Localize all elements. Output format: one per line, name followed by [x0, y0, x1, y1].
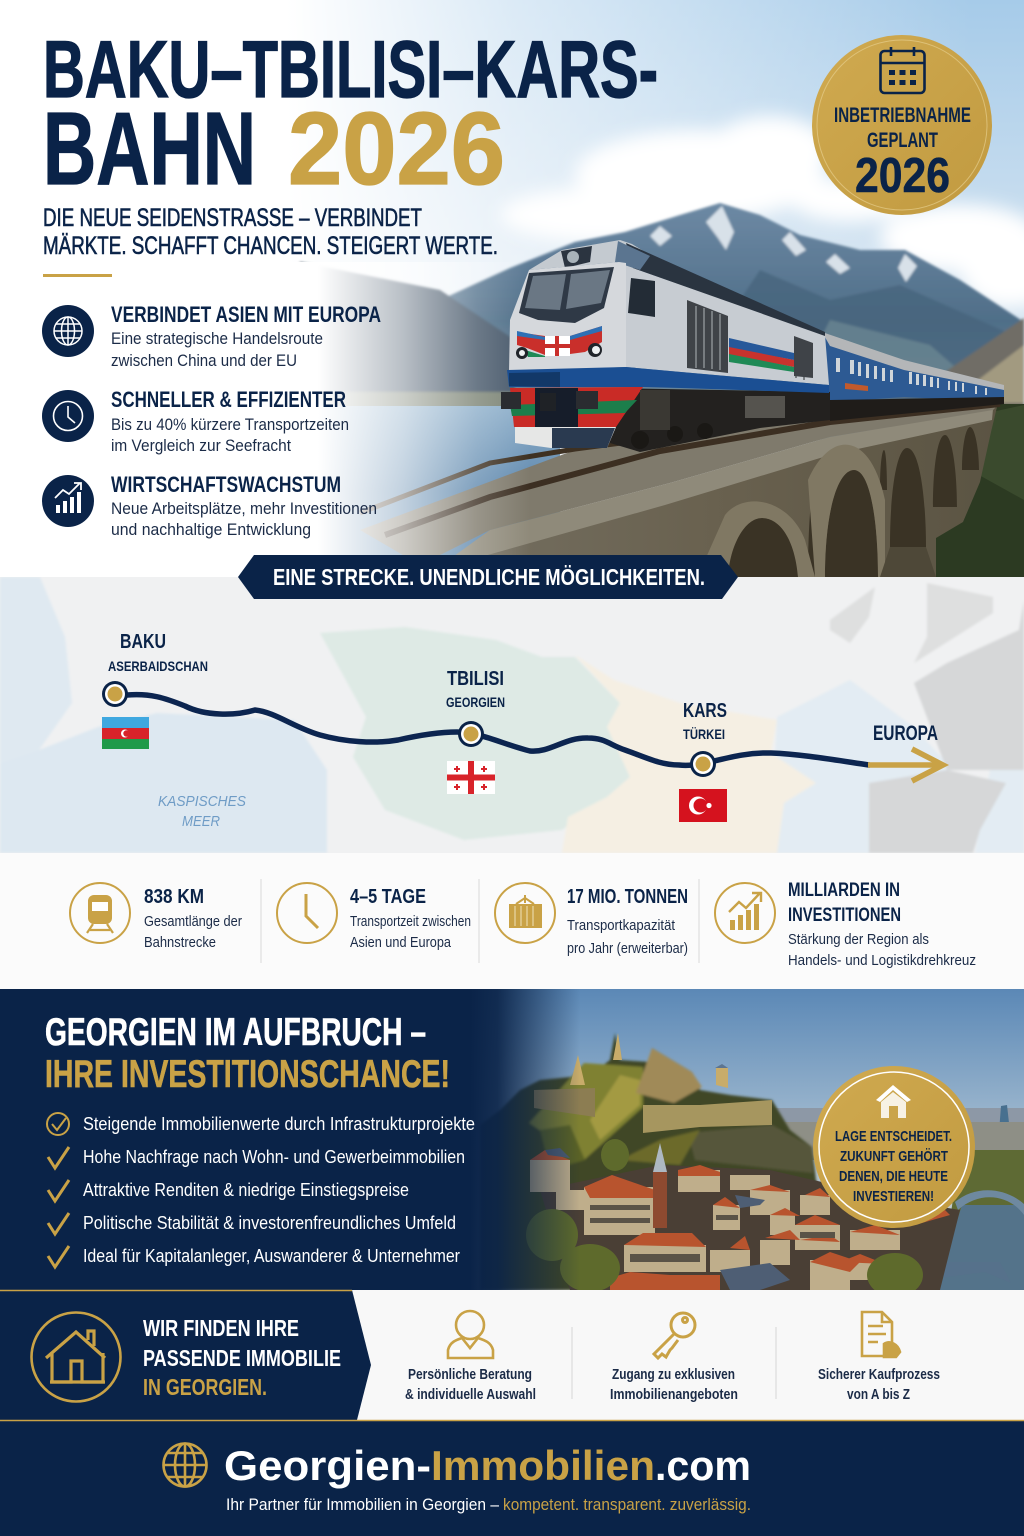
ribbon — [238, 555, 738, 599]
benefit: wirtschaft: und nachhaltige Entwicklung — [111, 520, 311, 539]
check list: Politische Stabilität & investorenfreundliches Umfeld — [83, 1213, 456, 1233]
wheels — [631, 431, 649, 449]
badge: Inbetriebnahme: 2026 — [855, 149, 950, 203]
front bumper stripes — [510, 387, 643, 427]
icon: circled check — [47, 1113, 69, 1135]
badge: Inbetriebnahme — [812, 35, 992, 215]
benefit: schneller — [42, 387, 349, 455]
flag Georgien — [447, 761, 495, 794]
subtitle — [43, 204, 498, 260]
city labels: TÜRKEI — [683, 726, 725, 742]
church tower — [653, 1172, 667, 1228]
trees — [526, 1139, 923, 1297]
benefit: schneller: im Vergleich zur Seefracht — [111, 436, 291, 455]
heading: GEORGIEN IM AUFBRUCH – — [45, 1011, 426, 1054]
stat: 4-5 Tage: 4–5 TAGE — [350, 886, 426, 908]
icon: container — [495, 883, 555, 943]
title: BAKU–TBILISI–KARS- — [43, 25, 658, 115]
service: Kaufprozess: Sicherer Kaufprozess — [818, 1367, 940, 1383]
icon: globe — [42, 305, 94, 357]
icon: calendar — [880, 47, 925, 93]
call to action arrow panel: IN GEORGIEN. — [143, 1374, 267, 1400]
benefit: Asien Europa — [42, 302, 381, 370]
sea label — [158, 796, 246, 826]
badge: Inbetriebnahme: GEPLANT — [867, 129, 938, 152]
check list — [47, 1113, 475, 1267]
icon: key — [654, 1313, 695, 1358]
front flag livery — [517, 332, 570, 355]
orange roofs — [530, 1150, 950, 1290]
title: BAHN — [43, 91, 256, 206]
benefit: Asien Europa: zwischen China und der EU — [111, 351, 297, 370]
land and sea shapes — [0, 577, 1024, 853]
title: 2026 — [288, 91, 505, 206]
icon: white house — [876, 1085, 911, 1118]
service: Zugang: Zugang zu exklusiven — [612, 1367, 735, 1383]
website address: Georgien- — [224, 1442, 431, 1489]
benefit: schneller: Bis zu 40% kürzere Transportzeiten — [111, 415, 349, 434]
icon: person — [448, 1311, 493, 1358]
stat: 17 Mio Tonnen — [495, 883, 688, 957]
city photo — [470, 989, 1024, 1297]
hero photo: train on viaduct in mountains — [298, 0, 1024, 577]
benefit: wirtschaft: WIRTSCHAFTSWACHSTUM — [111, 472, 341, 497]
stat: 838 km: Bahnstrecke — [144, 935, 216, 951]
benefit: wirtschaft: Neue Arbeitsplätze, mehr Investitionen — [111, 499, 377, 518]
tagline — [226, 1496, 751, 1514]
track and ballast — [360, 403, 1000, 565]
icon: house in ring — [32, 1312, 120, 1402]
city labels: GEORGIEN — [446, 694, 505, 710]
ribbon: EINE STRECKE. UNENDLICHE MÖGLICHKEITEN. — [273, 564, 705, 590]
badge: Lage entscheidet: INVESTIEREN! — [853, 1188, 934, 1205]
stat: 17 Mio Tonnen: pro Jahr (erweiterbar) — [567, 941, 688, 957]
icon: growth chart — [42, 475, 94, 527]
website address: .com — [655, 1442, 751, 1489]
stat: 4-5 Tage: Transportzeit zwischen — [350, 914, 471, 930]
tagline: Ihr Partner für Immobilien in Georgien – — [226, 1496, 500, 1514]
city labels — [108, 631, 938, 745]
loco undercarriage — [600, 388, 830, 452]
stat: 838 km: Gesamtlänge der — [144, 914, 242, 930]
sea label: KASPISCHES — [158, 793, 246, 810]
check list: Ideal für Kapitalanleger, Auswanderer & Unternehmer — [83, 1246, 460, 1266]
node Tbilisi — [458, 721, 484, 747]
viaduct wall — [425, 407, 997, 577]
stat: Milliarden — [715, 880, 976, 969]
stat: 838 km — [70, 883, 242, 951]
headlights — [516, 347, 528, 359]
castle walls — [643, 1100, 772, 1133]
node Kars — [690, 751, 716, 777]
locomotive and carriages — [501, 240, 1004, 452]
service: Beratung: Persönliche Beratung — [408, 1367, 532, 1383]
icon: gold globe — [164, 1444, 206, 1486]
website address: Immobilien — [431, 1442, 655, 1489]
stat: Milliarden: Stärkung der Region als — [788, 932, 929, 948]
service: Kaufprozess — [818, 1312, 940, 1403]
icon: clock — [277, 883, 337, 943]
service: Beratung — [405, 1311, 536, 1403]
roof — [529, 240, 650, 270]
stat: 4-5 Tage — [277, 883, 471, 951]
icon: growth chart — [715, 883, 775, 943]
sea label: MEER — [182, 813, 220, 830]
title — [43, 25, 658, 206]
side stripes — [729, 338, 794, 360]
stat: 838 km: 838 KM — [144, 886, 204, 908]
stat: Milliarden: INVESTITIONEN — [788, 905, 901, 926]
carriages — [822, 332, 1004, 421]
stat: 4-5 Tage: Asien und Europa — [350, 935, 452, 951]
panel: service band — [0, 1290, 1024, 1421]
badge: Lage entscheidet: ZUKUNFT GEHÖRT — [840, 1148, 948, 1165]
town base — [540, 1165, 960, 1290]
tagline: kompetent. transparent. zuverlässig. — [503, 1496, 751, 1514]
service: Kaufprozess: von A bis Z — [847, 1387, 910, 1403]
website address — [224, 1442, 751, 1489]
city labels: BAKU — [120, 631, 166, 653]
dark roofs and windows — [545, 1148, 790, 1290]
node Baku — [102, 681, 128, 707]
heading: IHRE INVESTITIONSCHANCE! — [45, 1053, 450, 1096]
check list: Hohe Nachfrage nach Wohn- und Gewerbeimmobilien — [83, 1147, 465, 1167]
check list: Steigende Immobilienwerte durch Infrastrukturprojekte — [83, 1114, 475, 1134]
flag Aserbaidschan — [102, 717, 149, 749]
stat: Milliarden: Handels- und Logistikdrehkreuz — [788, 953, 976, 969]
flag Türkei — [679, 789, 727, 822]
far bank greenery — [930, 404, 1024, 577]
blue band — [507, 367, 829, 393]
heading — [45, 1011, 450, 1096]
footer — [0, 1420, 1024, 1536]
loco side body — [619, 262, 829, 385]
city labels: EUROPA — [873, 722, 938, 745]
front body — [509, 262, 626, 372]
stat: 17 Mio Tonnen: 17 MIO. TONNEN — [567, 886, 688, 908]
side vents — [687, 300, 728, 373]
city labels: ASERBAIDSCHAN — [108, 658, 208, 674]
benefit: wirtschaft — [42, 472, 377, 539]
subtitle: MÄRKTE. SCHAFFT CHANCEN. STEIGERT WERTE. — [43, 232, 498, 260]
call to action arrow panel: WIR FINDEN IHRE — [143, 1315, 299, 1341]
benefit: schneller: SCHNELLER & EFFIZIENTER — [111, 387, 346, 412]
service: Beratung: & individuelle Auswahl — [405, 1387, 536, 1403]
lake — [330, 406, 560, 555]
badge: Lage entscheidet: LAGE ENTSCHEIDET. — [835, 1128, 952, 1145]
route map — [0, 577, 1024, 853]
icon: train — [70, 883, 130, 943]
lower skirt — [515, 427, 616, 448]
badge: Lage entscheidet: DENEN, DIE HEUTE — [839, 1168, 948, 1185]
stat: Milliarden: MILLIARDEN IN — [788, 880, 900, 901]
white fade over photo — [290, 262, 520, 555]
panel: Georgien investment — [0, 989, 1024, 1297]
clouds — [500, 116, 1024, 308]
side window — [628, 278, 655, 317]
left navy fade — [470, 989, 580, 1290]
icon: document — [862, 1312, 900, 1357]
badge: Inbetriebnahme: INBETRIEBNAHME — [834, 104, 971, 127]
city labels: TBILISI — [447, 668, 504, 690]
route line — [127, 695, 869, 765]
service: Zugang — [610, 1313, 738, 1403]
benefit: Asien Europa: Eine strategische Handelsroute — [111, 329, 323, 348]
wall tones of buildings — [530, 1160, 905, 1290]
mountains — [300, 203, 1024, 440]
call to action arrow panel — [0, 1290, 371, 1420]
windshield — [519, 267, 614, 323]
city labels: KARS — [683, 700, 727, 722]
stats band — [0, 853, 1024, 989]
icon: clock — [42, 390, 94, 442]
call to action arrow panel: PASSENDE IMMOBILIE — [143, 1345, 341, 1371]
benefit: Asien Europa: VERBINDET ASIEN MIT EUROPA — [111, 302, 381, 327]
subtitle: DIE NEUE SEIDENSTRASSE – VERBINDET — [43, 204, 422, 232]
stat: 17 Mio Tonnen: Transportkapazität — [567, 918, 675, 934]
badge: Lage entscheidet — [813, 1066, 975, 1228]
service: Zugang: Immobilienangeboten — [610, 1387, 738, 1403]
check list: Attraktive Renditen & niedrige Einstiegspreise — [83, 1180, 409, 1200]
hillside — [486, 1033, 818, 1290]
arrow to Europa — [868, 749, 943, 781]
